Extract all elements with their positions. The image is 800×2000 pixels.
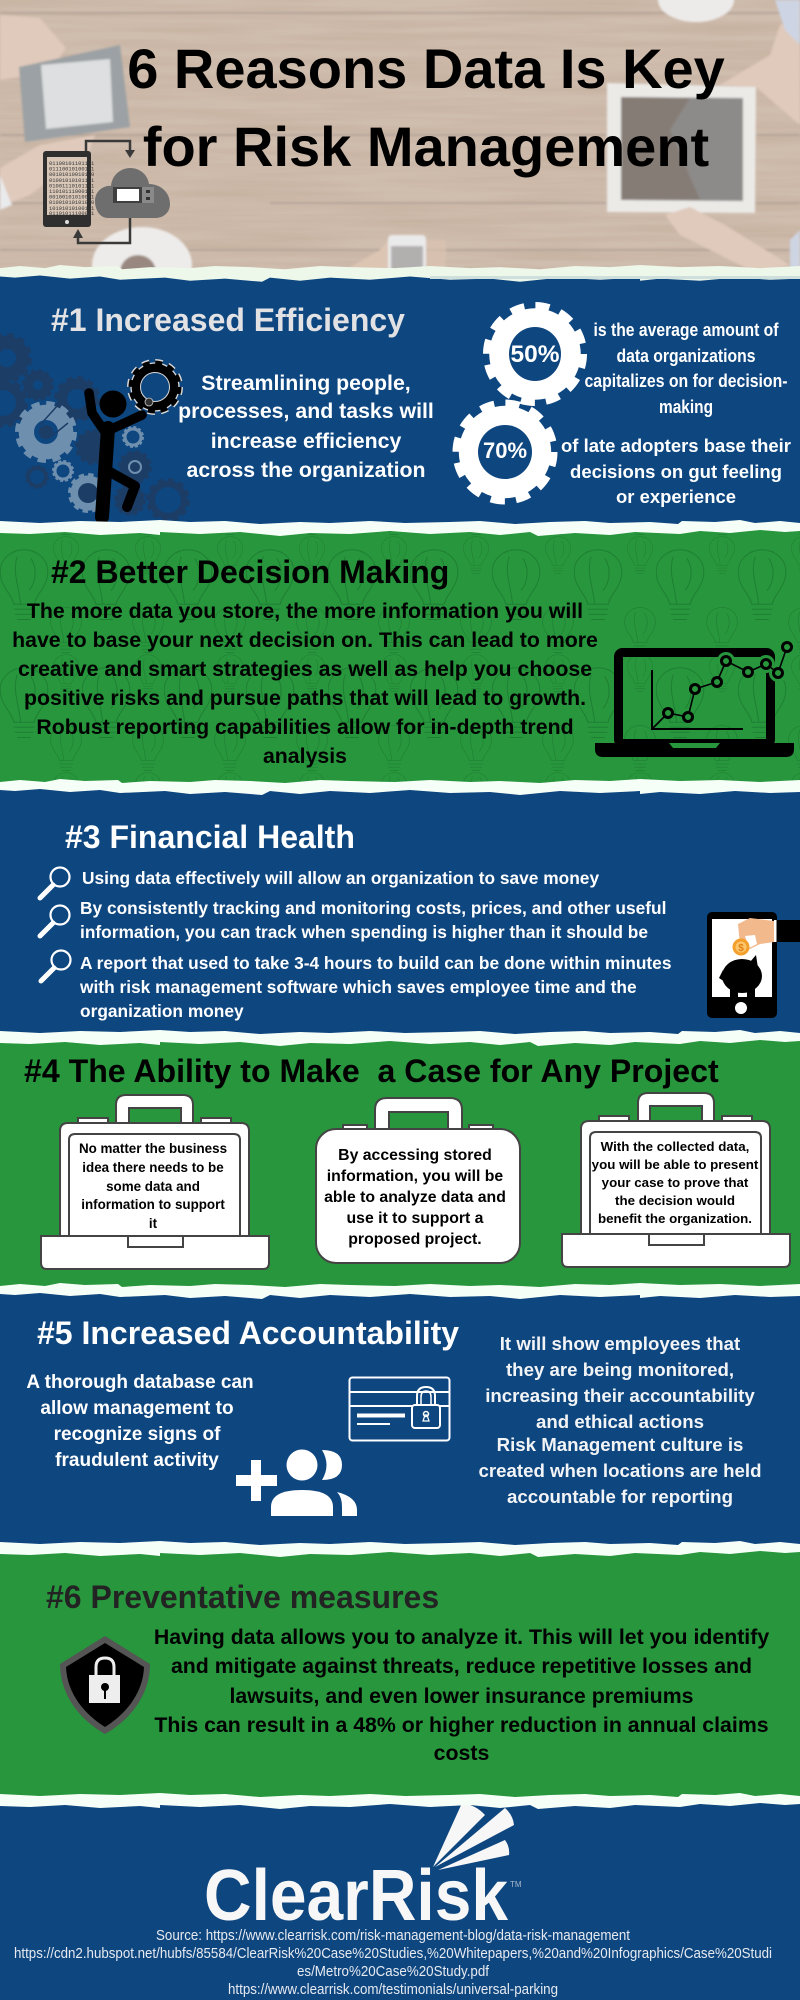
icon: shield with padlock	[60, 1636, 150, 1734]
text: body: Robust reporting capabilities allow for in-depth trend	[36, 715, 574, 739]
text: body: analysis	[263, 744, 347, 768]
stat: 50% gear: 50%	[510, 341, 560, 368]
panel: #2 better decision making	[0, 526, 800, 786]
text: body: costs	[434, 1741, 489, 1765]
icon: phone syncing data to cloud: 11010111000101	[49, 189, 94, 195]
text: body: creative and smart strategies as well as help you choose	[18, 657, 592, 681]
briefcase 2: information, you will be	[327, 1168, 503, 1185]
briefcase 1: information to support	[81, 1197, 225, 1212]
icon: phone syncing data to cloud: 00101010010110	[49, 172, 94, 178]
panel: #3 financial health	[0, 786, 800, 1038]
briefcase 3: your case to prove that	[602, 1175, 749, 1190]
text: right: accountable for reporting	[507, 1486, 733, 1507]
logo: ClearRisk	[204, 1803, 522, 1936]
panel: footer	[0, 1800, 800, 2000]
briefcase 1: some data and	[106, 1179, 200, 1194]
heading: #6 Preventative measures	[46, 1579, 439, 1615]
panel: #5 increased accountability	[0, 1290, 800, 1548]
icon: phone syncing data to cloud: 01110010100101	[49, 167, 94, 173]
text: body: The more data you store, the more information you will	[27, 599, 583, 623]
icon: phone syncing data to cloud: 01100101101101	[49, 161, 94, 167]
icon: laptop with line chart	[595, 642, 794, 757]
text: left: A thorough database can	[26, 1372, 254, 1393]
stat: 70% text: decisions on gut feeling	[570, 461, 782, 482]
text: left: fraudulent activity	[55, 1450, 219, 1471]
title: for Risk Management	[143, 115, 709, 178]
stat: 70% gear: 70%	[483, 438, 527, 463]
bullet text 3: with risk management software which saves employee time and the	[79, 977, 637, 997]
briefcase 3: the decision would	[615, 1193, 735, 1208]
icon: phone syncing data to cloud: 01001010101101	[49, 178, 94, 184]
icon: magnifier 3	[41, 950, 70, 981]
heading: #1 Increased Efficiency	[51, 302, 405, 338]
text: right: created when locations are held	[478, 1460, 762, 1481]
stat: 50% text: is the average amount of	[594, 320, 779, 340]
briefcase 2: able to analyze data and	[324, 1189, 506, 1206]
briefcase 1	[41, 1095, 269, 1269]
icon: phone syncing data to cloud: 10101010100101	[49, 206, 94, 212]
briefcase 2: By accessing stored	[338, 1147, 492, 1164]
icon: magnifier 1	[40, 868, 70, 898]
text: streamlining: Streamlining people,	[201, 371, 411, 395]
icon: phone piggy bank: $	[738, 943, 744, 954]
text: body: lawsuits, and even lower insurance premiums	[230, 1684, 693, 1708]
text: body: Having data allows you to analyze it. This will let you identify	[154, 1625, 769, 1649]
icon: phone syncing data to cloud	[43, 141, 170, 243]
bullet text 2: information, you can track when spending is higher than it should be	[80, 922, 648, 942]
icon: add users	[236, 1450, 357, 1516]
text: body: This can result in a 48% or higher reduction in annual claims	[154, 1713, 769, 1737]
briefcase 2: proposed project.	[348, 1231, 482, 1248]
panel: header	[0, 0, 800, 303]
text: right: increasing their accountability	[485, 1385, 755, 1406]
briefcase 2: use it to support a	[347, 1210, 484, 1227]
sources: Source: https://www.clearrisk.com/risk-management-blog/data-risk-management	[156, 1928, 630, 1944]
text: right: and ethical actions	[536, 1411, 704, 1432]
text: left: recognize signs of	[54, 1424, 221, 1445]
stat: 70% gear	[457, 404, 553, 500]
panel: #4 make a case	[0, 1038, 800, 1290]
text: streamlining: across the organization	[186, 458, 426, 482]
icon: phone syncing data to cloud: 00100101010001	[49, 195, 94, 201]
background: wooden desk photo	[0, 0, 800, 303]
text: streamlining: processes, and tasks will	[178, 399, 434, 423]
sources: https://www.clearrisk.com/testimonials/universal-parking	[228, 1982, 558, 1998]
stat: 50% text: making	[659, 397, 713, 417]
icon: phone syncing data to cloud: 01001010101010	[49, 200, 94, 206]
text: body: positive risks and pursue paths that will lead to growth.	[24, 686, 586, 710]
stat: 70% text: of late adopters base their	[561, 435, 791, 456]
panel: #6 preventative measures	[0, 1548, 800, 1800]
briefcase 2	[316, 1098, 520, 1263]
heading: #4 The Ability to Make a Case for Any Project	[24, 1053, 719, 1089]
icon: magnifier 2	[40, 906, 70, 936]
bullet text 2: By consistently tracking and monitoring costs, prices, and other useful	[80, 898, 666, 918]
bullet text 3: organization money	[80, 1001, 244, 1021]
text: streamlining: increase efficiency	[211, 429, 401, 453]
panel: #1 increased efficiency	[0, 272, 800, 526]
bullet text 1: Using data effectively will allow an organization to save money	[82, 868, 599, 888]
icon: phone syncing data to cloud: 01001110101101	[49, 183, 94, 189]
stat: 70% text: or experience	[616, 486, 736, 507]
stat: 50% text: data organizations	[616, 346, 756, 366]
torn paper dividers	[0, 265, 800, 1809]
logo: ClearRisk: TM	[510, 1880, 522, 1889]
text: body: and mitigate against threats, reduce repetitive losses and	[171, 1654, 752, 1678]
briefcase 1: No matter the business	[79, 1141, 227, 1156]
text: left: allow management to	[40, 1398, 234, 1419]
icon: phone piggy bank	[707, 912, 800, 1018]
text: right: It will show employees that	[500, 1333, 740, 1354]
stat: 50% gear	[487, 306, 583, 402]
briefcase 3	[562, 1093, 790, 1267]
briefcase 3: benefit the organization.	[598, 1211, 752, 1226]
heading: #2 Better Decision Making	[51, 554, 449, 590]
sources: es/Metro%20Case%20Study.pdf	[297, 1964, 490, 1980]
title: 6 Reasons Data Is Key	[127, 37, 725, 100]
icon: figure holding gear among cogs	[0, 335, 188, 520]
text: body: have to base your next decision on. This can lead to more	[12, 628, 598, 652]
icon: phone syncing data to cloud: 01101011100001	[49, 211, 94, 217]
briefcase 3: you will be able to present	[592, 1157, 759, 1172]
heading: #3 Financial Health	[65, 819, 355, 855]
bullet text 3: A report that used to take 3-4 hours to build can be done within minutes	[80, 953, 671, 973]
heading: #5 Increased Accountability	[37, 1315, 459, 1351]
briefcase 1: it	[149, 1216, 158, 1231]
briefcase 3: With the collected data,	[601, 1139, 749, 1154]
text: right: Risk Management culture is	[497, 1434, 743, 1455]
logo: ClearRisk: ClearRisk	[204, 1856, 509, 1936]
text: right: they are being monitored,	[506, 1359, 734, 1380]
briefcase 1: idea there needs to be	[82, 1160, 224, 1175]
icon: credit card with lock	[350, 1378, 450, 1440]
